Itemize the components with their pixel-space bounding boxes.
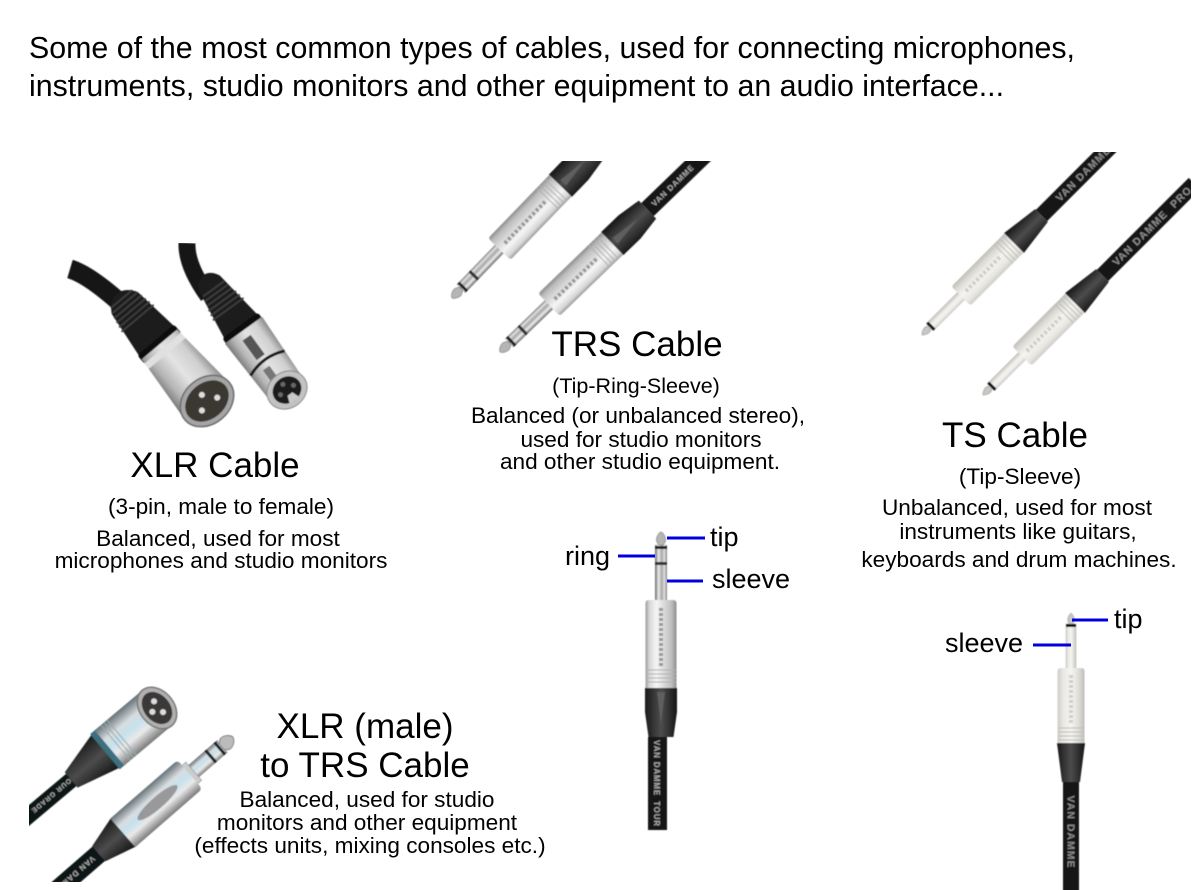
connector: TRS front plug: VAN DAMME [650, 163, 696, 208]
connector: XLR male [110, 288, 236, 428]
text: TRS description: Balanced (or unbalanced stereo), [471, 403, 805, 428]
photo: TRS cable pair [450, 161, 712, 354]
label: sleeve: sleeve [712, 564, 790, 594]
text: XLR description: microphones and studio monitors [55, 548, 387, 573]
text: XLR to TRS description: Balanced, used for studio [240, 787, 494, 812]
text: TS description: keyboards and drum machines. [861, 547, 1177, 572]
photo: XLR to TRS cable [29, 686, 235, 882]
title: instruments, studio monitors and other equipment to an audio interface... [29, 68, 1004, 103]
heading: XLR (male) to TRS Cable [260, 707, 470, 785]
text: XLR description [55, 494, 387, 573]
connector: XLR male end [29, 686, 178, 827]
heading: TS Cable: TS Cable [942, 416, 1088, 455]
heading: XLR Cable: XLR Cable [130, 446, 300, 485]
diagram: labelled TRS plug [565, 522, 790, 830]
text: TRS description [471, 374, 805, 474]
text: TS description [861, 464, 1177, 572]
arrow: ring leader [618, 554, 655, 558]
connector: vertical TS plug [1057, 613, 1085, 890]
cable: female lead [187, 243, 208, 296]
connector: TS rear plug: VAN DAMME [1054, 144, 1114, 204]
arrow: tip leader [667, 536, 705, 540]
diagram: labelled TS plug [945, 604, 1143, 890]
text: TRS description: (Tip-Ring-Sleeve) [552, 374, 720, 398]
connector: vertical TRS plug [645, 532, 677, 830]
connector: vertical TRS plug: TOUR [652, 801, 661, 827]
cable: male lead [70, 269, 126, 308]
arrow: sleeve leader [1033, 644, 1071, 646]
label: ring: ring [565, 541, 610, 571]
label: tip: tip [710, 522, 739, 552]
heading: XLR (male) to TRS Cable: XLR (male) [277, 707, 453, 746]
title: Some of the most common types of cables, used for connecting microphones, [29, 30, 1075, 65]
text: XLR to TRS description [194, 787, 546, 858]
connector: TS front plug: PRO [1168, 184, 1195, 211]
text: XLR description: (3-pin, male to female) [108, 494, 334, 519]
text: TRS description: used for studio monitors [520, 427, 762, 452]
heading: XLR (male) to TRS Cable: to TRS Cable [260, 746, 470, 785]
connector: vertical TRS plug: VAN DAMME [652, 740, 661, 796]
text: XLR description: Balanced, used for most [96, 526, 341, 551]
text: XLR to TRS description: (effects units, mixing consoles etc.) [194, 833, 546, 858]
text: TS description: instruments like guitars, [899, 519, 1137, 544]
title [29, 30, 1075, 103]
connector: TS front plug: VAN DAMME [1110, 208, 1170, 268]
photo: XLR cable male and female connectors [70, 243, 316, 437]
photo: TS cable pair [921, 152, 1191, 396]
connector: TRS end [50, 734, 235, 882]
label: tip: tip [1114, 604, 1143, 634]
label: sleeve: sleeve [945, 628, 1023, 658]
text: TS description: (Tip-Sleeve) [959, 464, 1081, 489]
arrow: tip leader [1072, 618, 1108, 622]
connector: TS rear plug [921, 152, 1118, 336]
connector: TRS rear plug [450, 161, 603, 300]
heading: TRS Cable: TRS Cable [551, 325, 723, 364]
connector: vertical TS plug: VAN DAMME [1064, 796, 1076, 868]
connector: TS front plug [982, 177, 1191, 396]
connector: XLR male end: TOUR GRADE [29, 773, 76, 814]
text: XLR to TRS description: monitors and other equipment [217, 810, 518, 835]
connector: XLR female [202, 272, 308, 410]
arrow: sleeve leader [667, 580, 703, 582]
connector: TRS front plug [498, 161, 712, 354]
text: TRS description: and other studio equipment. [500, 449, 780, 474]
text: TS description: Unbalanced, used for most [882, 495, 1153, 520]
